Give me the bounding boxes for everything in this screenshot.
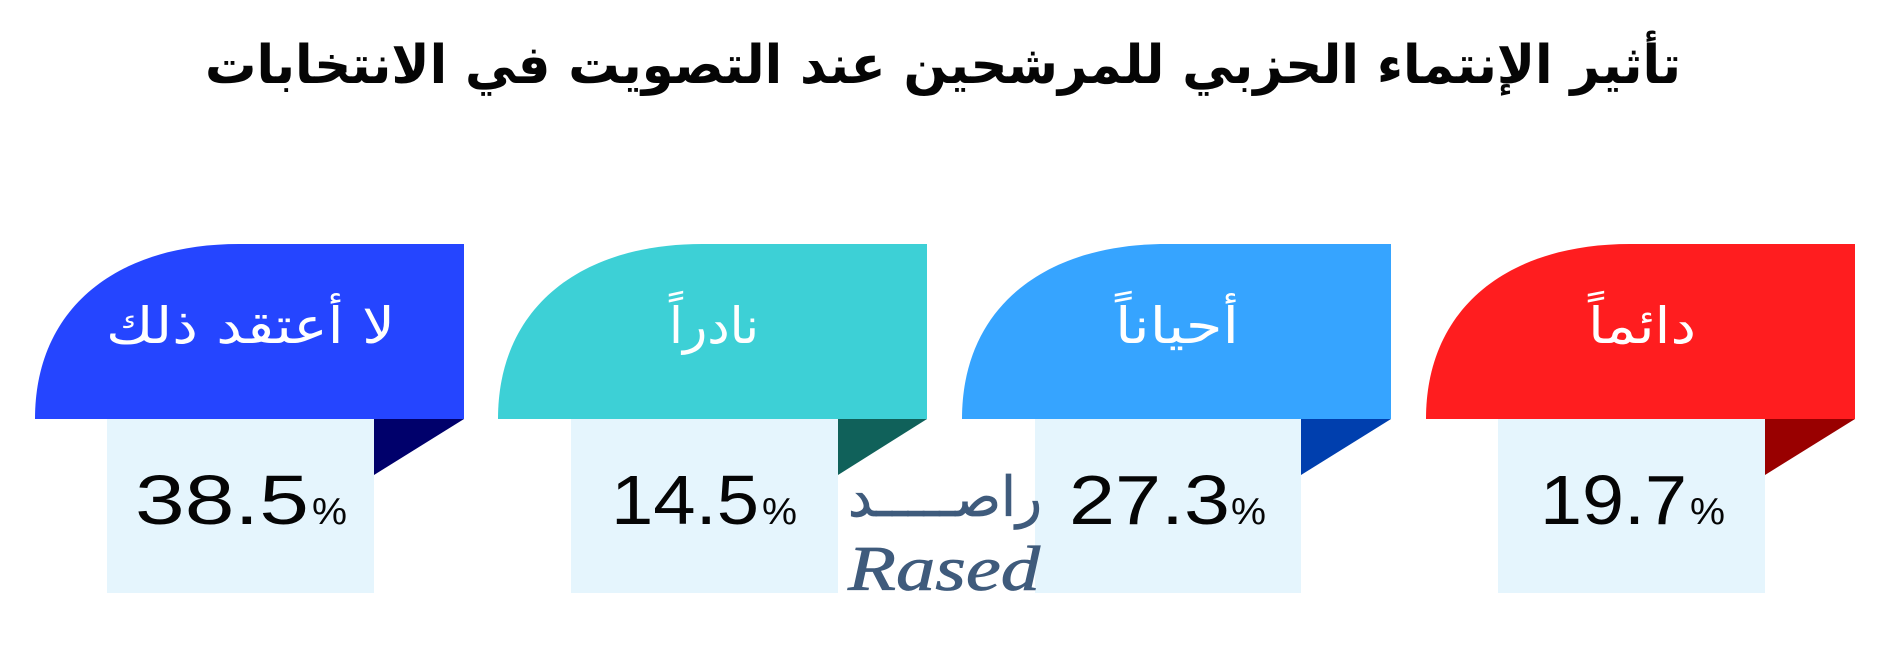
value box: always: [1498, 419, 1765, 593]
panel: do not think so: [35, 244, 464, 593]
ribbon fold: rarely: [838, 419, 927, 475]
title: تأثير الإنتماء الحزبي للمرشحين عند التصويت في الانتخابات: [205, 30, 1681, 96]
label: always: دائماً: [1587, 290, 1696, 355]
value box: do not think so: [107, 419, 374, 593]
value box: rarely: [571, 419, 838, 593]
ribbon fold: sometimes: [1301, 419, 1391, 475]
label: sometimes: أحياناً: [1114, 290, 1239, 355]
label: rarely: نادراً: [668, 290, 759, 355]
value: sometimes: %: [1231, 491, 1266, 533]
value: sometimes: 27.3: [1069, 461, 1230, 539]
panel: sometimes: [962, 244, 1391, 593]
value: sometimes: [1069, 461, 1266, 539]
logo: Rased: [847, 465, 1042, 604]
ribbon fold: do not think so: [374, 419, 464, 475]
panel: always: [1426, 244, 1855, 593]
value: do not think so: 38.5: [135, 461, 309, 539]
value: always: %: [1690, 491, 1725, 533]
label: do not think so: لا أعتقد ذلك: [106, 293, 395, 355]
ribbon: always: [1426, 244, 1855, 419]
logo latin wordmark: Rased: [847, 533, 1041, 604]
value: rarely: %: [762, 491, 797, 533]
ribbon: rarely: [498, 244, 927, 419]
ribbon: do not think so: [35, 244, 464, 419]
panel: rarely: [498, 244, 927, 593]
value: always: 19.7: [1540, 461, 1687, 539]
value: rarely: 14.5: [611, 461, 759, 539]
value: do not think so: %: [312, 491, 347, 533]
value box: sometimes: [1035, 419, 1301, 593]
value: do not think so: [135, 461, 347, 539]
ribbon fold: always: [1765, 419, 1855, 475]
ribbon: sometimes: [962, 244, 1391, 419]
logo arabic wordmark: راصـــــد: [848, 465, 1042, 529]
